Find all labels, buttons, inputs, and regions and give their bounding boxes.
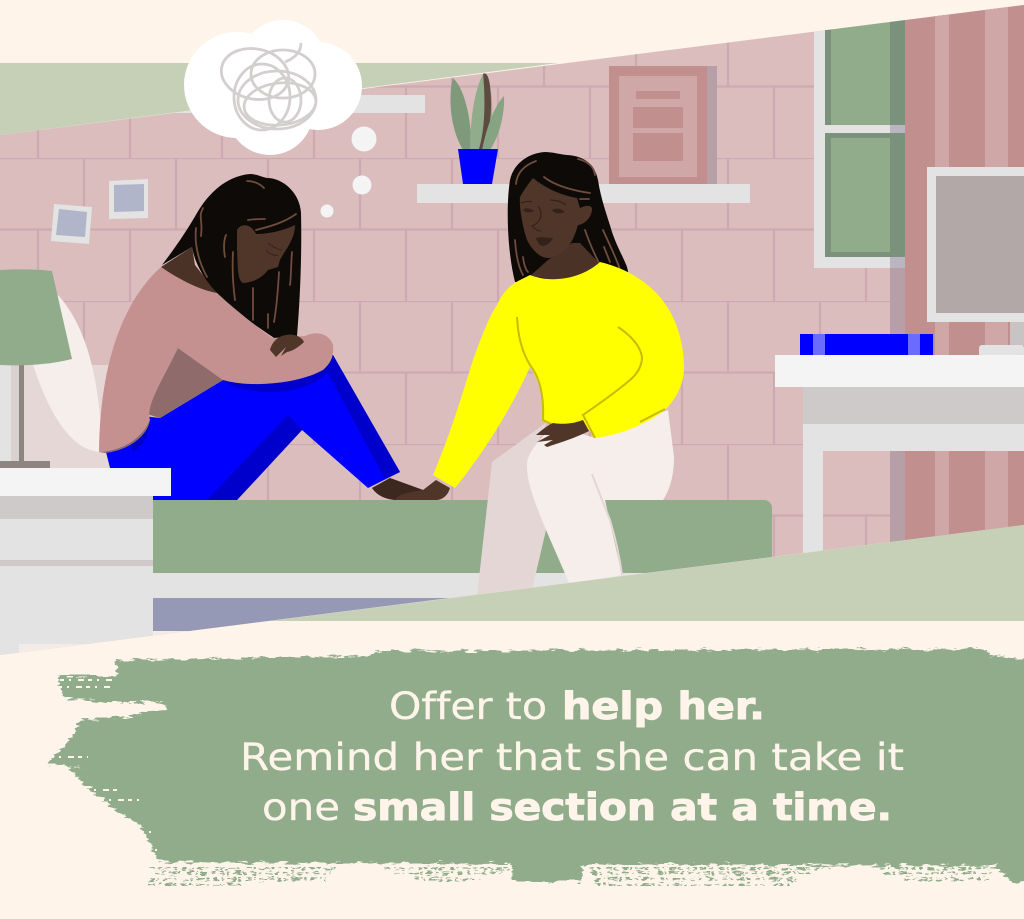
thought dots <box>320 126 376 218</box>
message text <box>240 685 904 829</box>
hand on knee <box>536 420 589 447</box>
room scene <box>0 0 1024 666</box>
torso shadow <box>149 348 223 418</box>
far leg <box>477 422 547 596</box>
brush stroke banner <box>47 649 1024 885</box>
mouth <box>536 237 553 246</box>
foot shadow <box>372 478 423 500</box>
message text: Offer to <box>389 685 547 728</box>
message text: small section at a time. <box>353 786 892 829</box>
message text: help her. <box>562 685 765 728</box>
lamp glow on wall <box>24 365 110 468</box>
cloud <box>184 20 362 155</box>
hair highlights <box>196 181 296 328</box>
hair <box>162 174 301 340</box>
wall shelf <box>417 184 750 203</box>
bottom brush fragments <box>150 868 1000 885</box>
hand on knee <box>270 334 304 357</box>
left edge cream fragments <box>50 680 160 850</box>
eyes <box>523 208 565 213</box>
pink sweater <box>99 267 333 452</box>
hair highlights <box>515 159 620 275</box>
nightstand <box>0 468 171 666</box>
yellow sweater <box>433 262 684 488</box>
wall photos <box>51 179 148 244</box>
person comforting <box>433 152 684 596</box>
trouser crease <box>592 474 622 575</box>
pale green wedge bottom right <box>270 525 1024 621</box>
leg underside shadow <box>207 415 302 500</box>
jeans <box>106 355 400 500</box>
thought bubble <box>184 20 362 155</box>
message text: one <box>262 786 340 829</box>
sweater folds <box>517 317 665 438</box>
pale green wedge top left <box>0 63 558 135</box>
window <box>814 0 905 268</box>
lamp <box>0 269 72 468</box>
bedside pillow <box>33 295 102 452</box>
desk <box>775 355 1024 561</box>
under bed <box>153 598 448 636</box>
feet and joined hands <box>372 478 450 500</box>
tangled scribble <box>217 42 318 130</box>
curtain <box>890 5 1024 542</box>
message text: Remind her that she can take it <box>240 736 904 779</box>
facial features <box>521 200 566 231</box>
neck <box>161 247 217 293</box>
face <box>237 225 295 283</box>
framed poster <box>609 66 717 184</box>
upper wall shelf <box>175 95 425 113</box>
monitor <box>927 167 1024 357</box>
brush body <box>47 649 1024 882</box>
brick wall <box>0 0 1024 660</box>
closed eye <box>266 243 282 255</box>
pocket shadow <box>130 418 150 452</box>
face <box>520 178 592 258</box>
hair <box>508 152 628 282</box>
potted plant <box>450 73 504 184</box>
neck <box>530 243 600 282</box>
person sitting with head down <box>99 174 450 500</box>
near leg <box>527 410 674 585</box>
books <box>800 334 933 355</box>
jeans shadows <box>223 355 400 479</box>
sweater hem shadow <box>99 420 150 453</box>
bed mattress <box>153 500 772 573</box>
bed frame <box>153 573 653 598</box>
